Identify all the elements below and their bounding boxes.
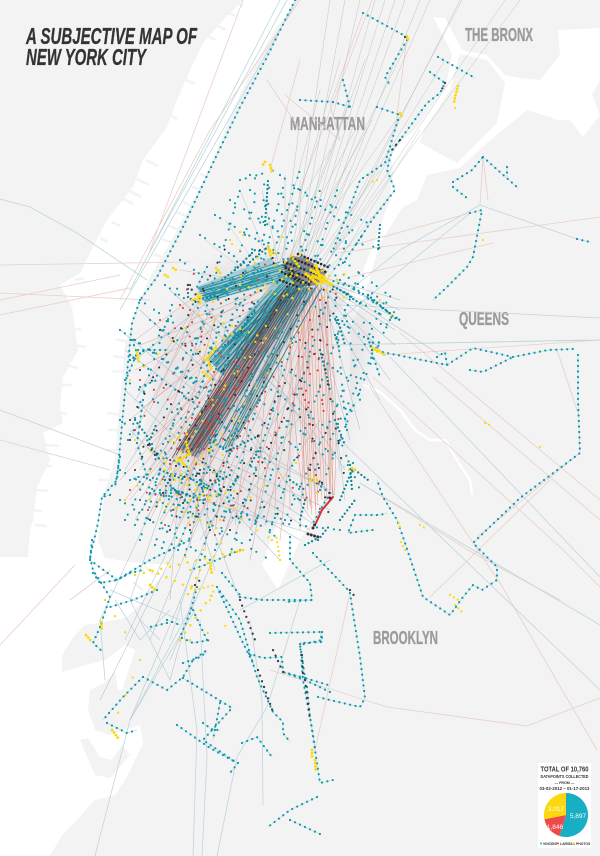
pie slice: Larissa	[544, 815, 566, 836]
legend subheading: DATAPOINTS COLLECTED	[540, 774, 589, 779]
hub: dense midtown core	[280, 254, 330, 288]
map: piers along the shoreline	[30, 0, 243, 590]
pie slice: photos	[544, 793, 566, 819]
pie slice: Vincent	[560, 793, 588, 837]
scatter: red data points	[130, 250, 345, 535]
map: islands and peninsulas	[80, 54, 505, 778]
line bundle: dark downtown corridor	[172, 285, 310, 458]
pie values: 1,846	[547, 824, 564, 831]
title	[25, 23, 197, 70]
label: The Bronx: THE BRONX	[465, 25, 533, 45]
scatter: dark data points	[130, 240, 345, 530]
legend background	[538, 763, 591, 848]
legend date range: 03-02-2012 – 01-17-2013	[540, 786, 590, 792]
yellow clusters of photo points	[2, 36, 541, 772]
line bundle: second teal corridor	[214, 280, 322, 448]
legend key: VINCENT	[543, 842, 559, 846]
scatter: teal data points across the avenues and streets	[120, 170, 400, 560]
place labels	[290, 25, 533, 648]
label: Queens: QUEENS	[459, 309, 509, 329]
label: Brooklyn: BROOKLYN	[373, 628, 438, 648]
line bundle: teal between midtown and the lower west side	[208, 272, 310, 376]
legend panel	[538, 763, 591, 848]
pie values: 5,897	[570, 813, 587, 820]
line bundle: gray trips heading north from midtown	[180, 0, 520, 282]
scatter: dense teal blocks downtown	[130, 180, 400, 545]
line bundle: teal between midtown and the west side	[198, 258, 300, 302]
label: Manhattan: MANHATTAN	[290, 114, 365, 134]
pie values	[547, 806, 587, 831]
pie values: 3,017	[548, 806, 565, 813]
bold red route into the Brooklyn cluster	[148, 37, 445, 720]
legend from label: — FROM —	[555, 781, 575, 785]
legend key	[540, 842, 591, 846]
legend key: LARISSA	[560, 842, 575, 846]
line bundle: red trips from midtown to Brooklyn neighbourhood	[290, 285, 336, 515]
legend key: PHOTOS	[576, 842, 591, 846]
title: A SUBJECTIVE MAP OF	[25, 23, 197, 49]
title: NEW YORK CITY	[26, 44, 147, 70]
pie chart	[544, 793, 588, 837]
line bundle: gray trips fanning out east and south	[100, 278, 440, 720]
line bundle: red trips between midtown and downtown	[120, 285, 320, 560]
legend heading: total: TOTAL OF 10,760	[540, 766, 589, 774]
density wash under the central data	[150, 250, 375, 525]
